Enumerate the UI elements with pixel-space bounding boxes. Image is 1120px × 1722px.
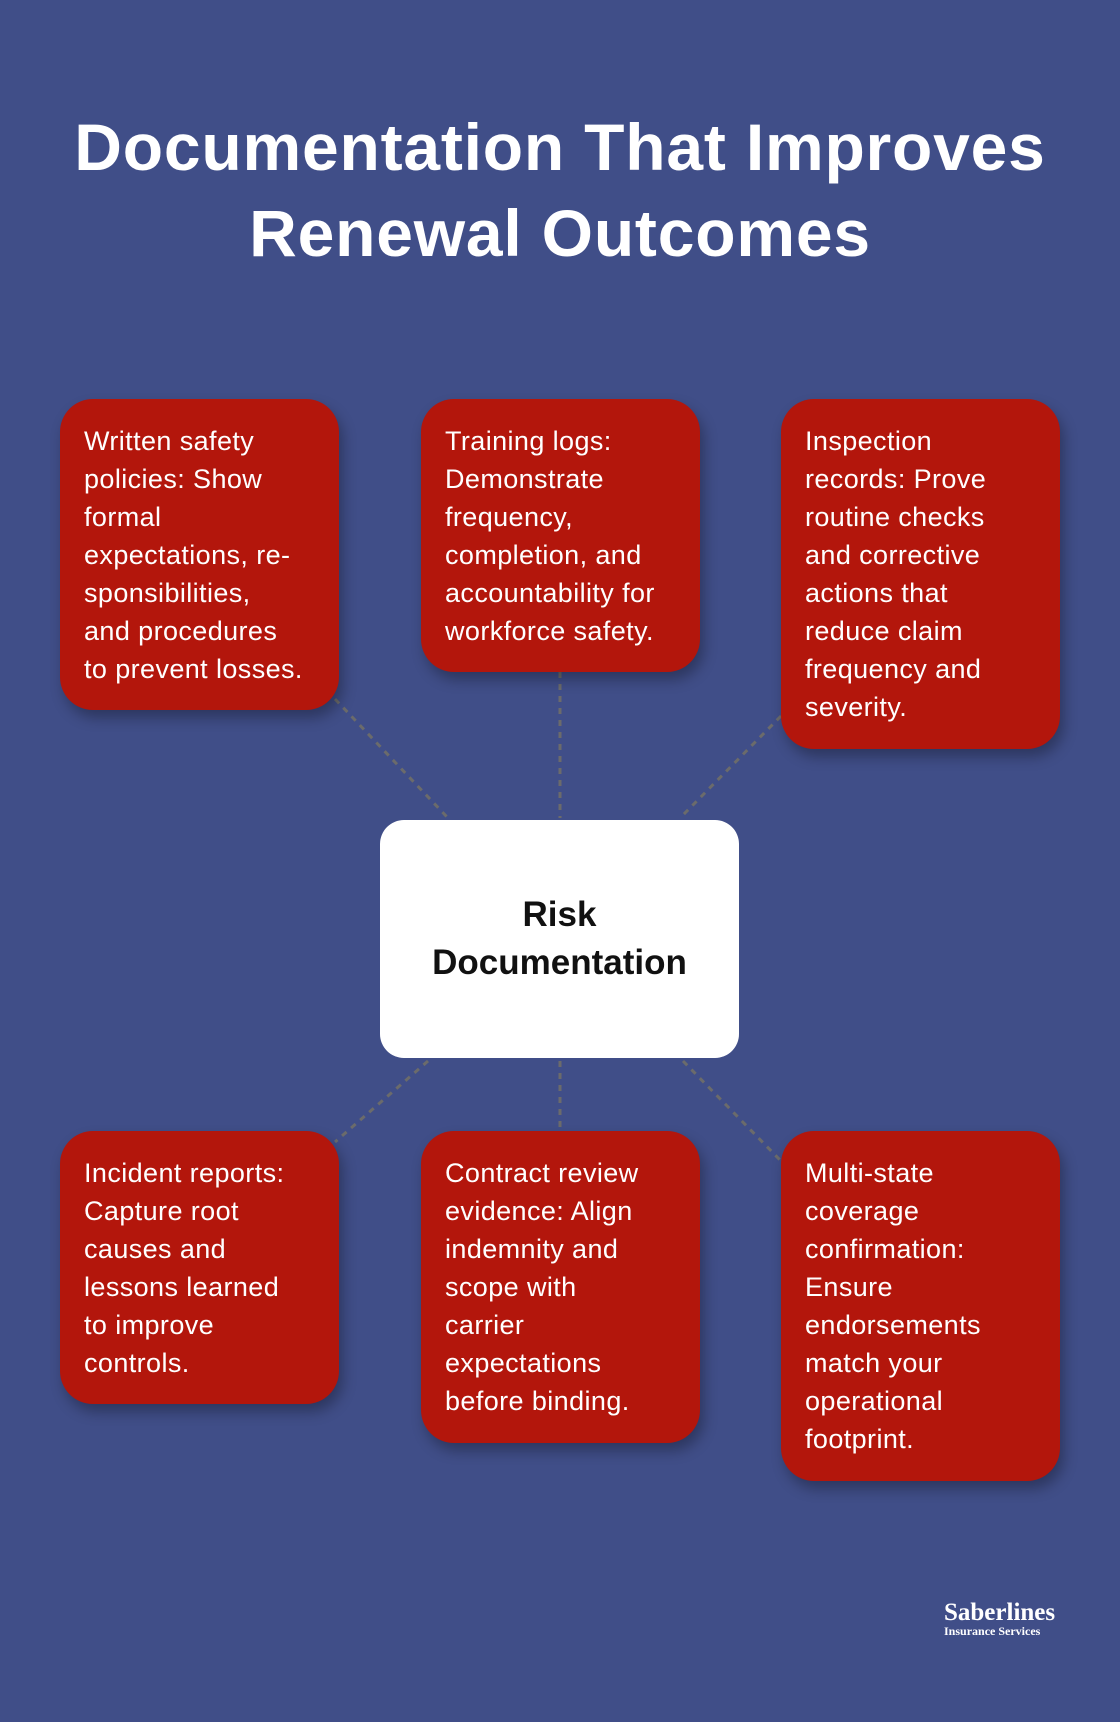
box: training logs: completion, and: [445, 540, 642, 570]
box: multi-state coverage: Multi-state: [805, 1158, 934, 1188]
box: inspection records: [781, 399, 1060, 749]
box: contract review: carrier: [445, 1310, 524, 1340]
box: written safety policies: expectations, re-: [84, 540, 290, 570]
box: incident reports: causes and: [84, 1234, 226, 1264]
box: inspection records: frequency and: [805, 654, 981, 684]
title: Documentation That Improves: [74, 110, 1046, 184]
logo: [944, 1599, 1055, 1638]
box: written safety policies: formal: [84, 502, 161, 532]
box: incident reports: Capture root: [84, 1196, 239, 1226]
box: multi-state coverage: footprint.: [805, 1424, 914, 1454]
box: multi-state coverage: confirmation:: [805, 1234, 965, 1264]
box: inspection records: Inspection: [805, 426, 932, 456]
center: risk documentation: Documentation: [432, 943, 687, 982]
box: incident reports: controls.: [84, 1348, 190, 1378]
box: contract review: before binding.: [445, 1386, 630, 1416]
box: multi-state coverage: Ensure: [805, 1272, 893, 1302]
box: training logs: workforce safety.: [445, 616, 654, 646]
logo: Insurance Services: [944, 1624, 1040, 1638]
box: contract review: evidence: Align: [445, 1196, 633, 1226]
box: multi-state coverage: coverage: [805, 1196, 919, 1226]
box: written safety policies: sponsibilities,: [84, 578, 251, 608]
title: Renewal Outcomes: [249, 196, 871, 270]
box: written safety policies: Written safety: [84, 426, 254, 456]
box: contract review: [421, 1131, 700, 1443]
box: training logs: [421, 399, 700, 672]
box: incident reports: to improve: [84, 1310, 214, 1340]
box: training logs: frequency,: [445, 502, 573, 532]
box: incident reports: [60, 1131, 339, 1404]
box: contract review: scope with: [445, 1272, 577, 1302]
title: [74, 110, 1046, 270]
box: inspection records: routine checks: [805, 502, 985, 532]
box: inspection records: reduce claim: [805, 616, 963, 646]
box: incident reports: lessons learned: [84, 1272, 279, 1302]
box: inspection records: records: Prove: [805, 464, 986, 494]
logo: Saberlines: [944, 1599, 1055, 1626]
box: written safety policies: to prevent losses.: [84, 654, 303, 684]
box: contract review: Contract review: [445, 1158, 639, 1188]
center: risk documentation: Risk: [523, 895, 596, 934]
box: multi-state coverage: operational: [805, 1386, 943, 1416]
box: written safety policies: and procedures: [84, 616, 277, 646]
center: risk documentation: [380, 820, 739, 1058]
box: written safety policies: [60, 399, 339, 710]
box: training logs: accountability for: [445, 578, 655, 608]
box: contract review: expectations: [445, 1348, 601, 1378]
box: inspection records: severity.: [805, 692, 907, 722]
box: multi-state coverage: match your: [805, 1348, 943, 1378]
box: incident reports: Incident reports:: [84, 1158, 284, 1188]
box: training logs: Training logs:: [445, 426, 612, 456]
box: multi-state coverage: endorsements: [805, 1310, 981, 1340]
box: multi-state coverage: [781, 1131, 1060, 1481]
box: inspection records: actions that: [805, 578, 948, 608]
box: training logs: Demonstrate: [445, 464, 604, 494]
box: inspection records: and corrective: [805, 540, 980, 570]
box: contract review: indemnity and: [445, 1234, 618, 1264]
box: written safety policies: policies: Show: [84, 464, 262, 494]
